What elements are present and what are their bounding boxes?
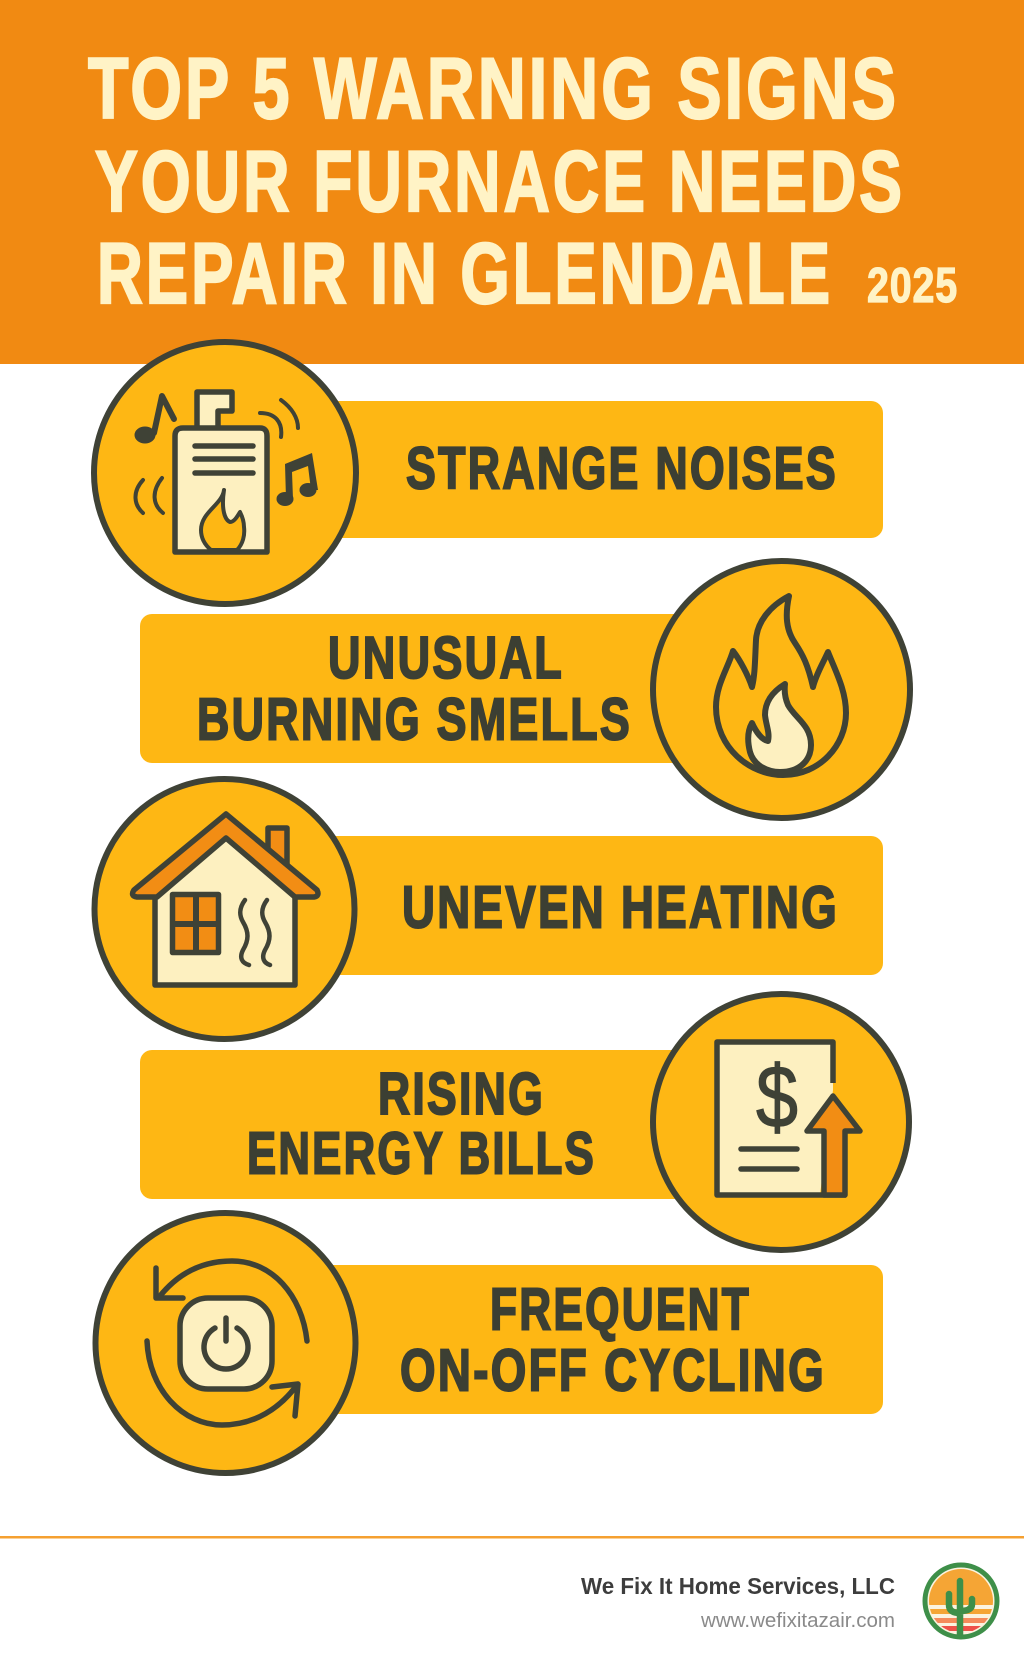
label 3: UNEVEN HEATING [402,874,839,940]
banner 3 [300,836,883,975]
label 1: STRANGE NOISES [406,436,838,502]
icon: house with heat waves [94,779,354,1039]
label 2: UNUSUAL [328,625,564,691]
label 5 [400,1276,826,1404]
footer company name: We Fix It Home Services, LLC [581,1573,895,1599]
sign 3: uneven heating [94,779,883,1039]
footer url: www.wefixitazair.com [700,1610,895,1632]
banner 2 [140,614,700,763]
label 5: FREQUENT [490,1276,751,1342]
banner 5 [300,1265,883,1414]
icon: bill with rising arrow: $ [756,1047,798,1146]
label 5: ON-OFF CYCLING [400,1338,826,1404]
icon: power cycle [96,1213,356,1473]
footer divider [0,1536,1024,1538]
label 4: RISING [378,1061,545,1127]
sign 5: frequent on-off cycling [96,1213,883,1473]
icon: bill with rising arrow [653,994,909,1250]
banner 4 [140,1050,700,1199]
banner 1 [300,401,883,538]
icon: flame [653,561,910,818]
logo: cactus sunset [925,1565,997,1637]
title: 2025 [867,259,958,313]
icon: noisy furnace [94,342,356,604]
sign 1: strange noises [94,342,883,604]
label 4 [247,1061,596,1186]
label 2: BURNING SMELLS [197,686,632,752]
sign 2: unusual burning smells [140,561,910,818]
label 2 [197,625,632,752]
header band [0,0,1024,364]
label 4: ENERGY BILLS [247,1120,596,1186]
sign 4: rising energy bills [140,994,909,1250]
title [88,41,958,322]
